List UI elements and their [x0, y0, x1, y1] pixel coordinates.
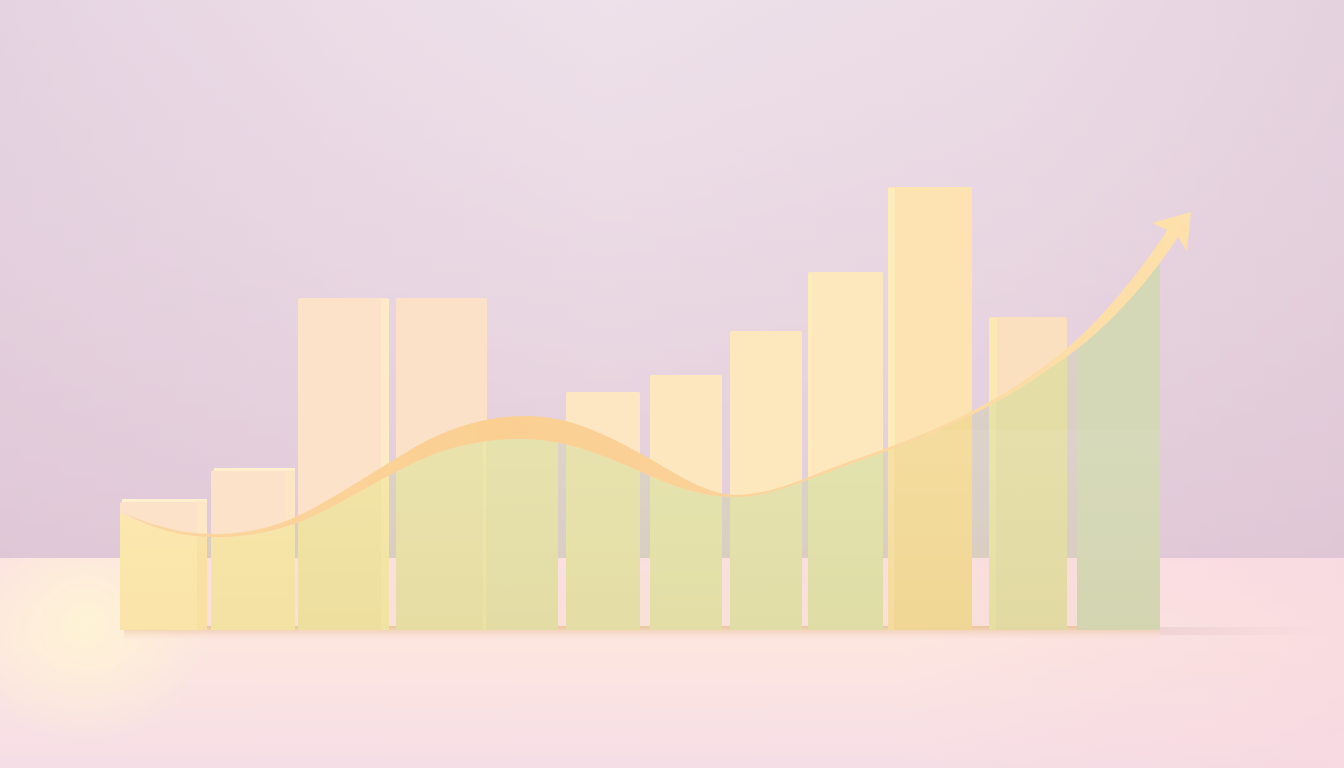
- shading over bars: [120, 430, 1160, 630]
- floor: [0, 558, 1344, 768]
- bar 5: [557, 629, 558, 630]
- bar 10: [888, 187, 972, 630]
- bar 8: [730, 331, 802, 630]
- bar base shadow: [124, 626, 1344, 640]
- bar 1: [120, 499, 207, 630]
- bar 6: [566, 392, 640, 630]
- bar 12: [1077, 255, 1160, 630]
- bar 3: [298, 298, 389, 630]
- bar 7: [650, 375, 722, 630]
- bar 4: [396, 298, 487, 630]
- trend ribbon with arrow: [122, 212, 1191, 537]
- bar 2: [211, 468, 295, 630]
- bar 11: [989, 317, 1067, 630]
- bar 9: [808, 272, 883, 630]
- background wall: [0, 0, 1344, 558]
- translucent area behind bars: [207, 349, 1077, 558]
